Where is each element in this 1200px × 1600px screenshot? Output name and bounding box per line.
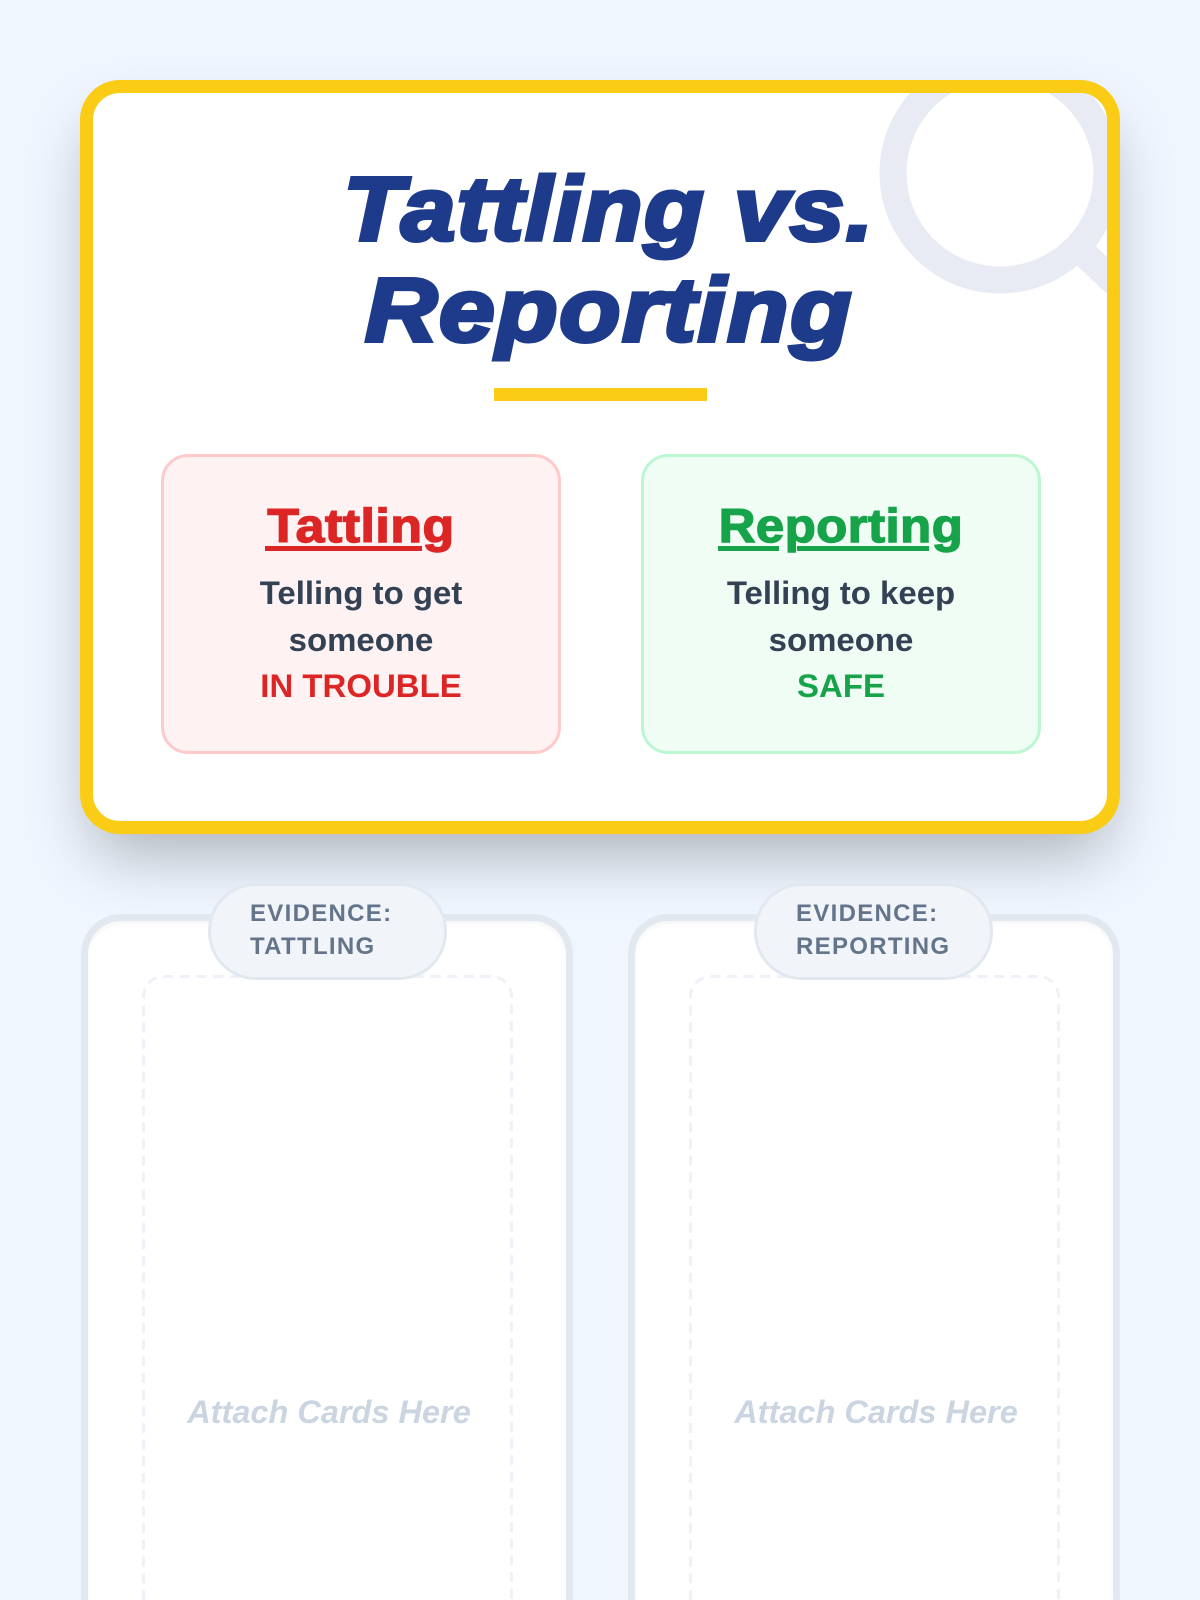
panel: evidence tattling bbox=[81, 914, 573, 1600]
title bbox=[343, 160, 875, 362]
tab: evidence tattling: EVIDENCE: bbox=[250, 900, 392, 927]
heading: tattling: Tattling bbox=[267, 499, 455, 552]
heading underline: reporting second part bbox=[797, 546, 929, 551]
text: tattling definition: Telling to get bbox=[260, 575, 462, 611]
panel: reporting definition bbox=[641, 454, 1041, 754]
tab: evidence reporting: REPORTING bbox=[796, 933, 950, 960]
icon: magnifying glass watermark bbox=[880, 93, 1107, 294]
title: Tattling vs. bbox=[343, 160, 875, 260]
text: reporting definition bbox=[727, 575, 955, 704]
heading: reporting: Reporting bbox=[719, 499, 963, 552]
text: tattling definition: someone bbox=[289, 622, 433, 658]
panel: evidence reporting bbox=[628, 914, 1120, 1600]
text: reporting definition: Telling to keep bbox=[727, 575, 955, 611]
title underline bar bbox=[494, 388, 707, 401]
placeholder text: tattling: Attach Cards Here bbox=[187, 1394, 471, 1430]
panel: tattling definition bbox=[161, 454, 561, 754]
text: reporting definition: SAFE bbox=[797, 668, 885, 704]
heading underline: tattling bbox=[265, 546, 422, 551]
text: tattling definition bbox=[260, 575, 462, 704]
dashed attach area: tattling bbox=[142, 975, 513, 1600]
text: tattling definition: IN TROUBLE bbox=[260, 668, 462, 704]
tab: evidence reporting: EVIDENCE: bbox=[796, 900, 938, 927]
dashed attach area: reporting bbox=[689, 975, 1060, 1600]
placeholder text: reporting: Attach Cards Here bbox=[734, 1394, 1018, 1430]
tab: evidence tattling bbox=[208, 883, 447, 980]
heading underline: reporting first part bbox=[718, 546, 779, 551]
panel: definition card bbox=[80, 80, 1120, 834]
title: Reporting bbox=[365, 261, 853, 361]
text: reporting definition: someone bbox=[769, 622, 913, 658]
tab: evidence tattling: TATTLING bbox=[250, 933, 375, 960]
tab: evidence reporting bbox=[754, 883, 993, 980]
